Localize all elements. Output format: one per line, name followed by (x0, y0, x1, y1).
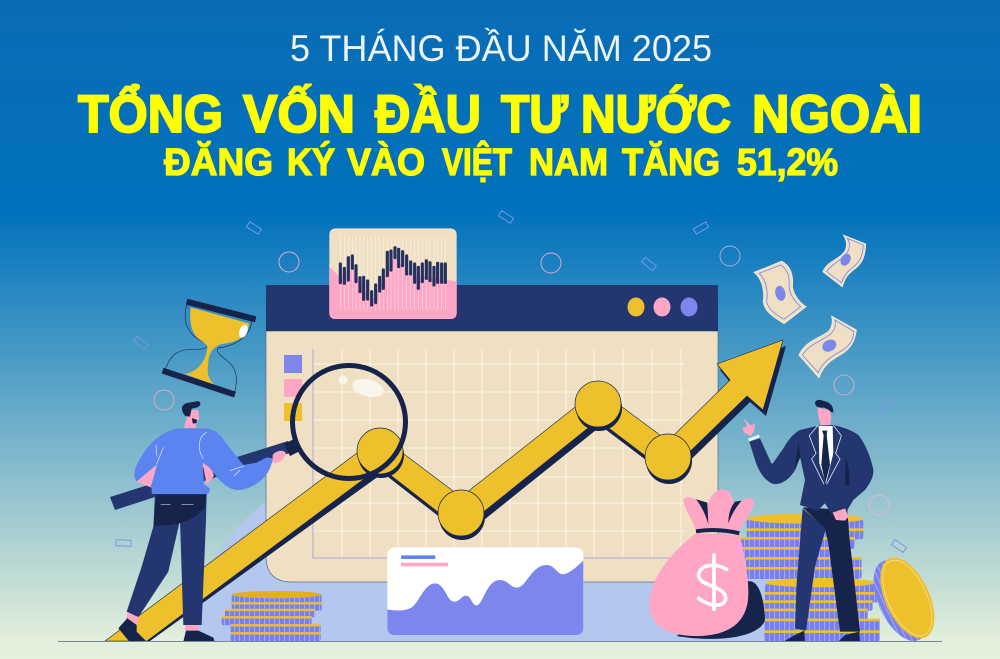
caps (187, 302, 256, 319)
person: businessman (742, 400, 873, 642)
sweater folds (156, 432, 244, 476)
title: sub heading: VIỆT (442, 140, 512, 184)
pointing hand (742, 418, 755, 436)
title: main heading: VỐN (243, 84, 355, 144)
jacket shade (795, 442, 849, 487)
legs (783, 507, 860, 642)
title: main heading: NƯỚC (581, 84, 731, 144)
vertical guide lines (340, 237, 445, 310)
arrow shadow (108, 346, 786, 641)
title: period: 5 THÁNG ĐẦU NĂM 2025 (290, 28, 712, 69)
grid (313, 349, 685, 558)
area chart card (387, 547, 583, 635)
hair (182, 401, 200, 417)
upper body (742, 400, 873, 521)
bill 1 (754, 261, 806, 324)
money bills (754, 235, 866, 378)
lapels (809, 425, 841, 484)
window header (266, 285, 718, 331)
title: sub heading: KÝ (287, 140, 335, 184)
title: main heading: TƯ (501, 85, 568, 144)
shoes (783, 631, 860, 642)
shirt (819, 426, 833, 483)
glare (237, 324, 249, 339)
sand (185, 307, 249, 385)
title: sub heading: 51,2% (737, 142, 838, 184)
title: sub heading: NAM (529, 142, 608, 184)
folds (696, 499, 742, 524)
bag body (649, 533, 748, 636)
pink hands behind sweater (137, 463, 214, 487)
cuff (749, 436, 759, 440)
title: sub heading: ĐĂNG (164, 140, 273, 184)
title: main heading: ĐẦU (375, 84, 481, 144)
lens glare (350, 376, 386, 400)
dollar sign (699, 555, 727, 609)
legend squares (284, 355, 302, 421)
jacket (749, 425, 873, 514)
neck and face (184, 410, 199, 428)
legs (118, 494, 215, 642)
hourglass (163, 302, 256, 395)
title: sub heading: TĂNG (622, 140, 720, 184)
area (387, 561, 583, 635)
coin stack: left (222, 591, 322, 641)
hand on hip (833, 508, 849, 521)
ground line (58, 640, 942, 642)
arrow band (105, 340, 783, 641)
pink area (329, 256, 457, 319)
title: sub heading: VÀO (347, 140, 425, 184)
hair (815, 400, 833, 413)
magnifier (110, 366, 406, 510)
handle (110, 441, 293, 510)
tie (696, 530, 739, 533)
candles (340, 248, 445, 305)
arrow nodes (357, 381, 692, 540)
upper body (134, 401, 286, 494)
bag shadow (677, 581, 765, 639)
glass outline (165, 303, 252, 393)
shoes (118, 618, 215, 642)
person: analyst (118, 401, 286, 642)
sweater (134, 428, 273, 494)
hand on handle (273, 451, 286, 463)
legend bars (401, 555, 435, 559)
socks (126, 613, 198, 631)
lower stack (752, 578, 880, 642)
bag neck ruffle (683, 489, 754, 531)
coin stacks: right (734, 514, 946, 649)
lens ring (292, 366, 406, 478)
title: main heading (78, 84, 922, 144)
tie (821, 431, 830, 483)
fallen coin (862, 549, 946, 649)
coin rims (222, 603, 322, 633)
bill 2 (823, 235, 866, 287)
panel: chart window (266, 285, 718, 582)
mini candlestick chart card (329, 228, 457, 319)
neck and face (818, 407, 833, 430)
upper stack (734, 514, 863, 579)
window body (266, 331, 718, 582)
title: main heading: NGOÀI (752, 84, 922, 144)
growth arrow (105, 340, 786, 641)
title: main heading: TỔNG (78, 84, 223, 144)
bill 3 (799, 316, 856, 378)
money bag (649, 489, 765, 639)
title: sub heading (164, 140, 838, 184)
header dots (628, 298, 698, 316)
decorative circles and tags (116, 211, 906, 552)
light blue backdrop (190, 480, 780, 641)
